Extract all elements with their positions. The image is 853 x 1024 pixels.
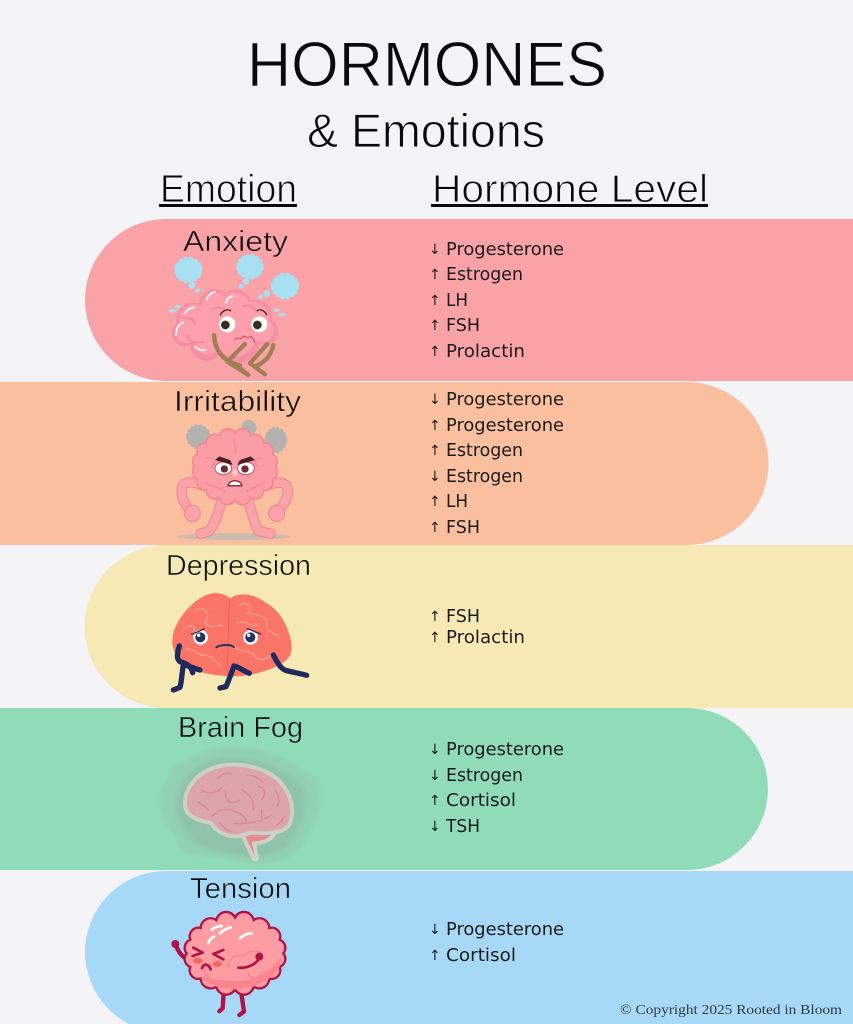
- panel: tension: [85, 871, 853, 1024]
- label: brain fog: Brain Fog: [178, 712, 303, 744]
- list: irritability hormones: [429, 390, 564, 538]
- panel: anxiety: [85, 219, 853, 381]
- list: anxiety hormones: ↑: [429, 267, 441, 283]
- list: brain fog hormones: ↓: [429, 768, 441, 784]
- label: irritability: Irritability: [174, 386, 302, 418]
- list: irritability hormones: Estrogen: [446, 441, 523, 461]
- panel: depression: [84, 545, 853, 708]
- list: depression hormones: FSH: [446, 607, 480, 627]
- list: anxiety hormones: ↑: [429, 318, 441, 334]
- band: tension: [85, 871, 853, 1024]
- list: irritability hormones: FSH: [446, 518, 480, 538]
- list: irritability hormones: ↓: [429, 469, 441, 485]
- list: irritability hormones: Progesterone: [446, 416, 564, 436]
- label: depression: Depression: [166, 550, 311, 582]
- list: depression hormones: [429, 607, 525, 648]
- list: tension hormones: ↑: [429, 948, 441, 964]
- list: brain fog hormones: ↑: [429, 793, 441, 809]
- list: anxiety hormones: ↑: [429, 344, 441, 360]
- list: irritability hormones: Estrogen: [446, 467, 523, 487]
- list: brain fog hormones: Cortisol: [446, 791, 516, 811]
- column heading: hormone level: Hormone Level: [432, 168, 708, 211]
- list: anxiety hormones: [429, 240, 564, 362]
- label: anxiety: Anxiety: [183, 226, 289, 258]
- list: irritability hormones: ↑: [429, 443, 441, 459]
- list: brain fog hormones: ↓: [429, 819, 441, 835]
- list: anxiety hormones: ↑: [429, 293, 441, 309]
- list: brain fog hormones: TSH: [445, 817, 480, 837]
- copyright: © Copyright 2025 Rooted in Bloom: [620, 1002, 843, 1017]
- list: tension hormones: [429, 920, 564, 966]
- label: tension: Tension: [190, 873, 291, 905]
- list: brain fog hormones: [429, 740, 564, 837]
- icon: sad brain: [172, 593, 307, 690]
- list: depression hormones: ↑: [429, 630, 441, 646]
- list: depression hormones: ↑: [429, 609, 441, 625]
- list: depression hormones: Prolactin: [446, 628, 525, 648]
- icon: tense brain: [171, 912, 285, 1015]
- band: brain fog: [0, 708, 768, 870]
- list: irritability hormones: Progesterone: [446, 390, 564, 410]
- column heading: emotion: Emotion: [160, 168, 297, 211]
- icon: foggy brain: [160, 747, 320, 864]
- list: brain fog hormones: ↓: [429, 742, 441, 758]
- list: anxiety hormones: LH: [446, 291, 468, 311]
- list: irritability hormones: ↑: [429, 520, 441, 536]
- list: anxiety hormones: ↓: [429, 242, 441, 258]
- title: HORMONES: [247, 30, 607, 100]
- list: tension hormones: ↓: [429, 922, 441, 938]
- list: irritability hormones: LH: [446, 492, 468, 512]
- list: irritability hormones: ↑: [429, 494, 441, 510]
- list: tension hormones: Progesterone: [446, 920, 564, 940]
- list: anxiety hormones: FSH: [446, 316, 480, 336]
- subtitle: & Emotions: [307, 104, 545, 157]
- list: anxiety hormones: Progesterone: [446, 240, 564, 260]
- band: anxiety: [85, 219, 853, 381]
- panel: brain fog: [0, 708, 768, 870]
- list: brain fog hormones: Estrogen: [446, 766, 523, 786]
- panel: irritability: [0, 382, 768, 545]
- list: anxiety hormones: Estrogen: [446, 265, 523, 285]
- list: irritability hormones: ↑: [429, 418, 441, 434]
- icon: angry brain: [177, 420, 291, 540]
- band: depression: [84, 545, 853, 708]
- list: anxiety hormones: Prolactin: [446, 342, 525, 362]
- band: irritability: [0, 382, 768, 545]
- list: irritability hormones: ↓: [429, 392, 441, 408]
- list: brain fog hormones: Progesterone: [446, 740, 564, 760]
- icon: anxious brain: [169, 254, 299, 375]
- list: tension hormones: Cortisol: [446, 946, 516, 966]
